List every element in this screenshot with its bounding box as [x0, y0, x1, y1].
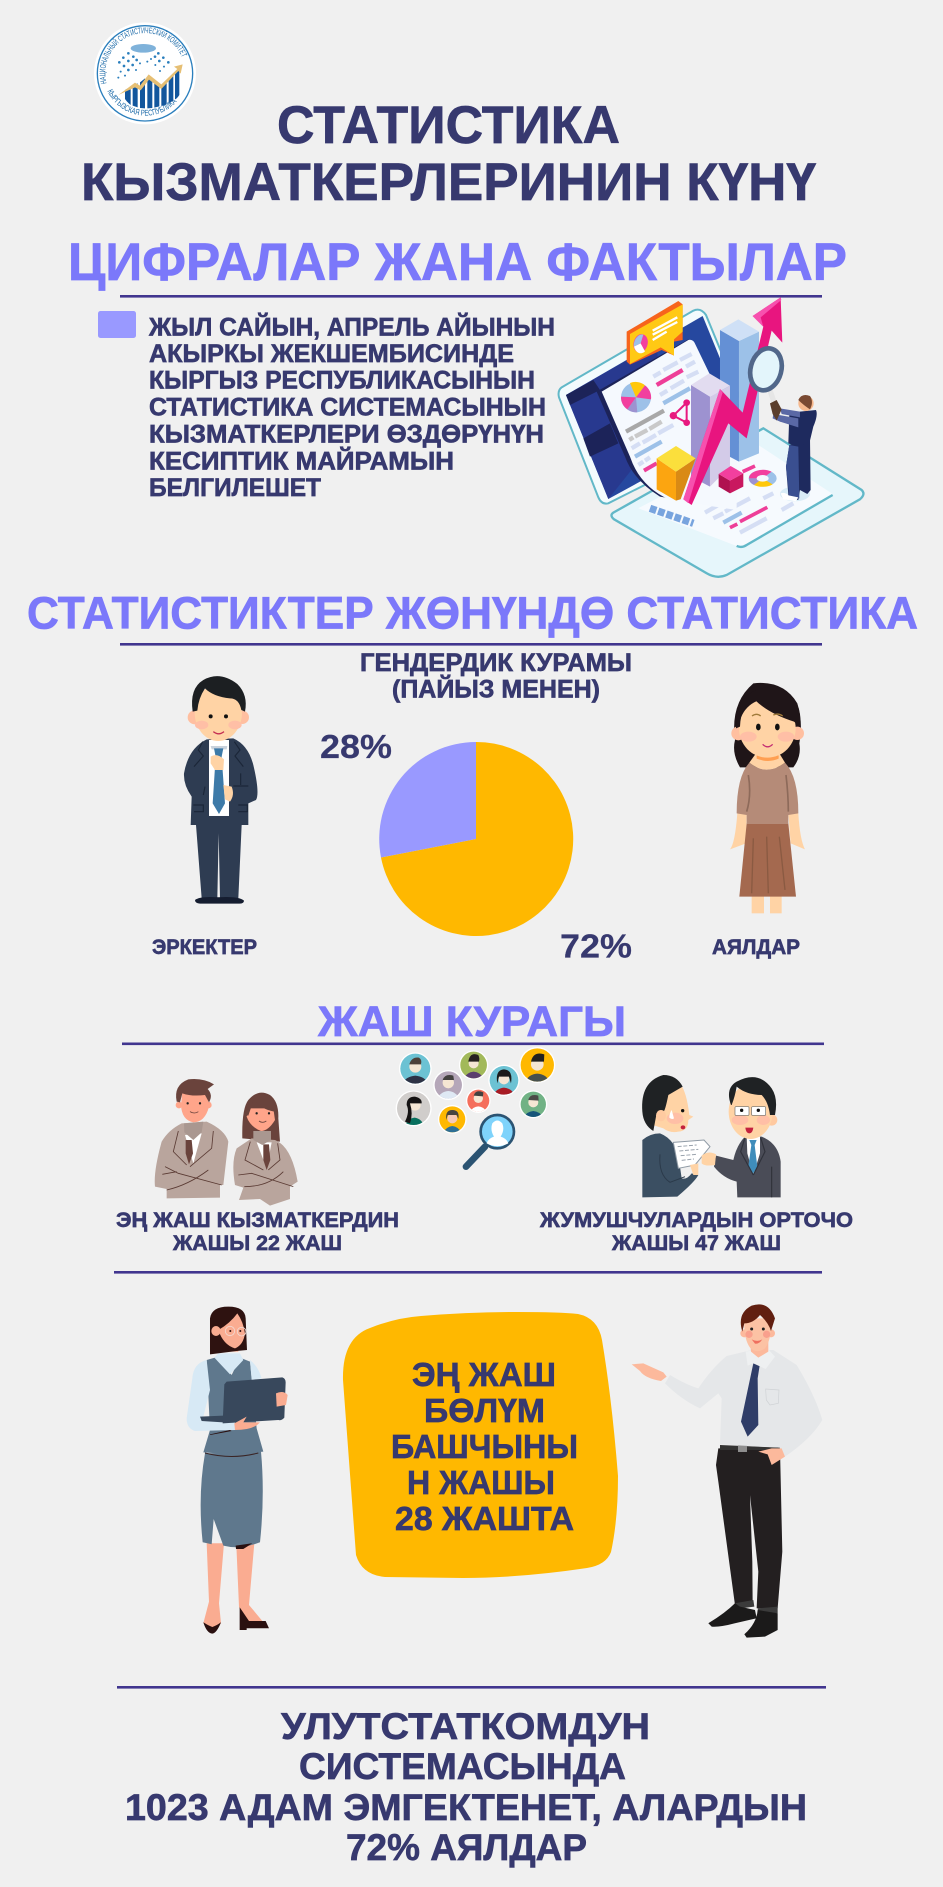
text: youngest employee age: ЖАШЫ 22 ЖАШ [172, 1230, 342, 1255]
title: СТАТИСТИКА [277, 96, 620, 155]
magenta cube [719, 474, 730, 493]
logo: national statistical committee [94, 22, 196, 124]
chart heading: gender composition: ГЕНДЕРДИК КУРАМЫ [360, 649, 632, 677]
callout on laptop [627, 301, 683, 365]
floating sheet of report [597, 339, 727, 507]
head [210, 1307, 247, 1354]
callout blob: youngest department head: ЭҢ ЖАШ [412, 1356, 556, 1393]
pie slice: men 28% [379, 742, 476, 858]
title [81, 96, 817, 212]
closing statement: СИСТЕМАСЫНДА [299, 1746, 626, 1787]
logo: national statistical committee: НАЦИОНАЛЬНЫЙ СТАТИСТИЧЕСКИЙ КОМИТЕТ [100, 27, 188, 84]
callout blob: youngest department head [343, 1312, 618, 1578]
laptop screen [566, 316, 747, 499]
magnifying glass [769, 388, 775, 405]
pie slice: women 72% [381, 742, 573, 936]
icon: man in shirt and tie pointing [632, 1304, 822, 1638]
text: youngest employee age [116, 1207, 399, 1255]
illustration: laptop with charts and analyst [559, 297, 863, 577]
callout blob: youngest department head: БАШЧЫНЫ [391, 1428, 578, 1465]
label: women: АЯЛДАР [712, 935, 800, 959]
young man [155, 1122, 228, 1198]
donut chart [749, 470, 777, 487]
text: average employee age: ЖАШЫ 47 ЖАШ [611, 1230, 781, 1255]
text block: holiday description: КЕСИПТИК МАЙРАМЫН [149, 445, 454, 475]
purple column [691, 385, 710, 487]
closing statement: 72% АЯЛДАР [346, 1827, 587, 1868]
blue column [720, 330, 739, 462]
closing statement: 1023 АДАМ ЭМГЕКТЕНЕТ, АЛАРДЫН [125, 1787, 807, 1828]
callout blob: youngest department head: БӨЛҮМ [424, 1392, 545, 1429]
label: men: ЭРКЕКТЕР [152, 935, 257, 959]
text block: holiday description: ЖЫЛ САЙЫН, АПРЕЛЬ АЙЫНЫН [148, 312, 555, 342]
text block: holiday description: КЫРГЫЗ РЕСПУБЛИКАСЫНЫН [149, 367, 535, 395]
value: men 28%: 28% [320, 728, 392, 765]
chart heading: gender composition [360, 649, 632, 704]
callout blob: youngest department head: Н ЖАШЫ [407, 1464, 555, 1501]
icon: two colleagues discussing a document [642, 1075, 781, 1197]
closing statement [125, 1706, 807, 1868]
heading: figures and facts: ЦИФРАЛАР ЖАНА ФАКТЫЛАР [68, 233, 847, 292]
right person [714, 1137, 781, 1197]
pie chart: gender shares [379, 742, 573, 936]
value: women 72%: 72% [560, 928, 632, 964]
icon: woman holding laptop [187, 1307, 288, 1634]
left person [642, 1133, 698, 1197]
title: КЫЗМАТКЕРЛЕРИНИН КҮНҮ [81, 153, 817, 212]
chart heading: gender composition: (ПАЙЫЗ МЕНЕН) [392, 674, 600, 704]
sheet network diagram [673, 403, 687, 423]
text: average employee age: ЖУМУШЧУЛАРДЫН ОРТОЧО [539, 1207, 853, 1232]
icon: woman [730, 683, 805, 913]
yellow cube [657, 458, 676, 501]
text block: holiday description: БЕЛГИЛЕШЕТ [149, 474, 321, 502]
closing statement: УЛУТСТАТКОМДУН [281, 1706, 650, 1747]
callout blob: youngest department head: 28 ЖАШТА [395, 1500, 574, 1537]
text block: holiday description: АКЫРКЫ ЖЕКШЕМБИСИНДЕ [149, 340, 514, 368]
young woman [242, 1093, 280, 1142]
sheet pie chart [621, 382, 651, 412]
pink arrow [683, 297, 782, 505]
text block: holiday description [148, 312, 555, 502]
logo: national statistical committee: КЫРГЫЗСКАЯ РЕСПУБЛИКА [108, 88, 177, 116]
document [673, 1140, 710, 1168]
laptop screen frame [559, 310, 753, 504]
icon: young man and woman with crossed arms [155, 1079, 298, 1206]
laptop [200, 1416, 223, 1422]
magnifier [466, 1147, 485, 1167]
text: average employee age [539, 1207, 853, 1255]
text block: holiday description: КЫЗМАТКЕРЛЕРИ ӨЗДӨРҮНҮН [149, 420, 544, 448]
heading: age composition: ЖАШ КУРАГЫ [317, 998, 626, 1046]
analyst figure [780, 487, 810, 501]
text: youngest employee age: ЭҢ ЖАШ КЫЗМАТКЕРДИН [116, 1207, 399, 1232]
paper on base [638, 445, 833, 547]
heading: statistics about statisticians: СТАТИСТИКТЕР ЖӨНҮНДӨ СТАТИСТИКА [27, 588, 918, 638]
bullet square [98, 311, 136, 338]
laptop base [611, 428, 863, 577]
icon: people circle avatars with magnifier [396, 1047, 555, 1167]
icon: man in suit [184, 676, 257, 904]
text block: holiday description: СТАТИСТИКА СИСТЕМАСЫНЫН [149, 394, 546, 422]
